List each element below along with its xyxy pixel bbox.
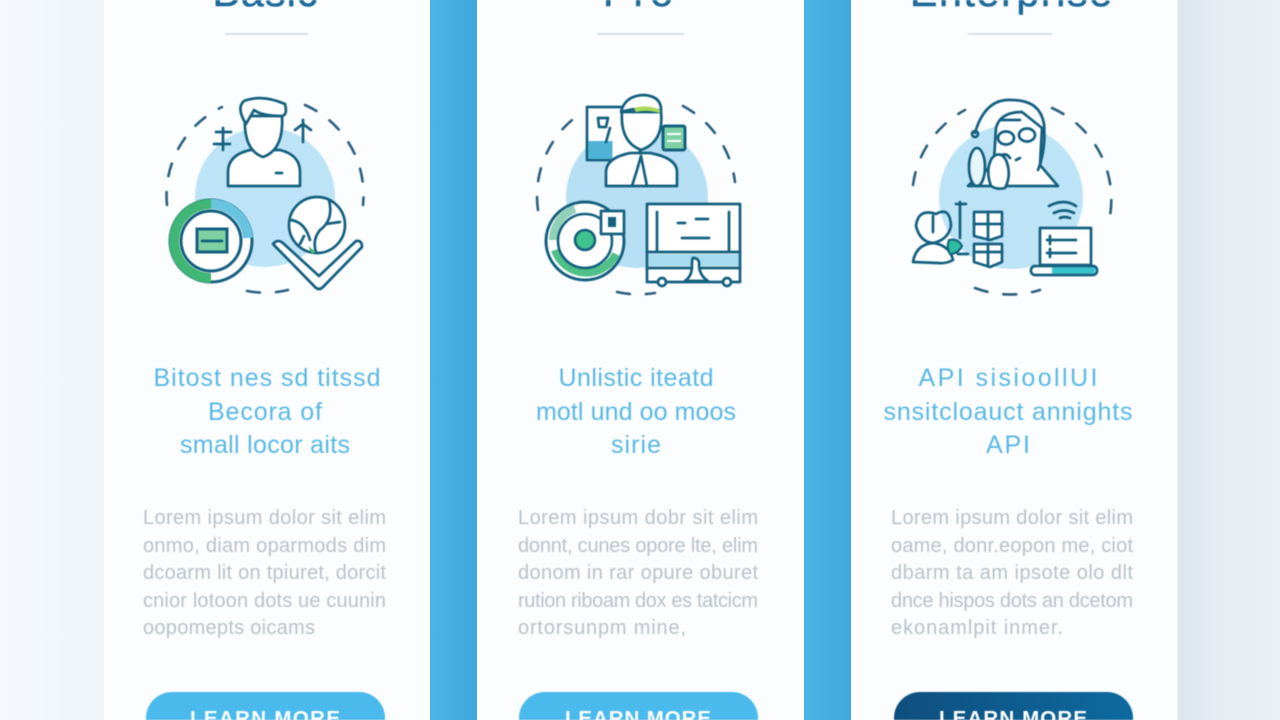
text: Pro subtitle [536, 364, 736, 459]
text: Pro body: ortorsunpm mine, [518, 617, 686, 639]
button: Basic learn more [146, 692, 385, 720]
icon: small arrows [214, 120, 311, 150]
text: Basic body: dcoarm lit on tpiuret, dorcit [143, 562, 386, 584]
text: Basic body: cnior lotoon dots ue cuunin [143, 590, 386, 612]
text: Pro body: rution riboam dox es tatcicm [518, 590, 758, 612]
text: Pro subtitle: sirie [611, 431, 661, 459]
icon: Pro illustration [537, 95, 740, 294]
icon: support agent [968, 100, 1058, 189]
button: Pro learn more [519, 692, 758, 720]
divider: Basic [225, 33, 308, 35]
text: Enterprise subtitle [884, 364, 1132, 459]
icon: Basic illustration [167, 98, 364, 293]
text: Basic body: onmo, diam oparmods dim [143, 535, 386, 557]
blue strip: right [804, 0, 851, 720]
text: Enterprise body: Lorem ipsum dolor sit elim [891, 507, 1133, 529]
text: Basic subtitle: small locor aits [180, 431, 350, 459]
text: Basic body: oopomepts oicams [143, 617, 315, 639]
icon: globe and check [273, 197, 362, 289]
text: Pro body: Lorem ipsum dobr sit elim [518, 507, 758, 529]
blue strip: left [430, 0, 477, 720]
icon: person [228, 98, 300, 186]
text: Enterprise body [891, 507, 1133, 639]
text: Enterprise subtitle: snsitcloauct annights [884, 398, 1132, 426]
icon: ring chart [170, 200, 252, 282]
text: Enterprise body: oame, donr.eopon me, ciot [891, 535, 1133, 557]
text: Enterprise body: dbarm ta am ipsote olo dlt [891, 562, 1133, 584]
text: Basic body [143, 507, 386, 639]
icon: presenter [606, 95, 677, 186]
icon: desktop monitor [647, 204, 740, 286]
text: Enterprise subtitle: API [986, 431, 1030, 459]
text: Pro body: donnt, cunes opore lte, elim [518, 535, 758, 557]
icon: database blocks [974, 212, 1002, 267]
text: Pro body [518, 507, 758, 639]
text: Enterprise body: ekonamlpit inmer. [891, 617, 1063, 639]
panel: Pro card [477, 0, 804, 720]
panel: Enterprise card [851, 0, 1177, 720]
text: Pro body: donom in rar opure oburet [518, 562, 758, 584]
text: Enterprise body: dnce hispos dots an dcetom [891, 590, 1133, 612]
icon: target chart [546, 202, 624, 280]
panel: Basic card [104, 0, 430, 720]
button: Enterprise learn more [894, 692, 1133, 720]
text: Basic subtitle [154, 364, 380, 459]
icon: Enterprise illustration [913, 100, 1111, 294]
text: Enterprise subtitle: API sisioollUI [918, 364, 1098, 392]
icon: presentation board [587, 107, 640, 160]
text: Pro subtitle: motl und oo moos [536, 398, 736, 426]
text: Pro subtitle: Unlistic iteatd [558, 364, 714, 392]
icon: team member [913, 202, 968, 263]
text: Basic subtitle: Becora of [208, 398, 322, 426]
icon: document tag [663, 126, 685, 150]
icon: laptop [1031, 202, 1097, 275]
text: Basic body: Lorem ipsum dolor sit elim [143, 507, 386, 529]
text: Basic subtitle: Bitost nes sd titssd [154, 364, 380, 392]
divider: Enterprise [968, 33, 1052, 35]
divider: Pro [597, 33, 684, 35]
